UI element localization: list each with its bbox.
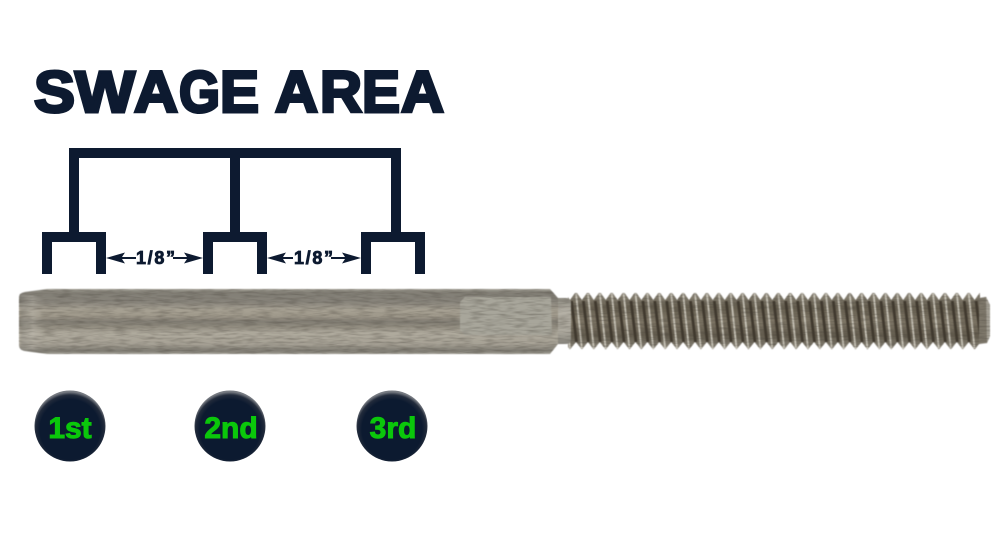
- title: R: [320, 60, 362, 125]
- neck: [551, 298, 571, 344]
- title: E: [362, 60, 400, 125]
- badge: 2nd: [194, 390, 266, 462]
- bracket: 2nd swage: [203, 232, 267, 274]
- dimension: second 1/8 inch spacing: 1/8”: [294, 248, 333, 268]
- smooth shank: [19, 289, 558, 354]
- badge: 3rd: [356, 390, 428, 462]
- bracket: 3rd swage: [361, 232, 425, 274]
- title: A: [275, 60, 318, 125]
- title: E: [220, 60, 259, 125]
- title: S: [34, 60, 75, 125]
- swage area bracket: [42, 148, 425, 274]
- dimension: first 1/8 inch spacing: [106, 248, 203, 268]
- chamfered tip highlight: [21, 294, 45, 350]
- title: G: [179, 60, 220, 125]
- title: W: [75, 60, 135, 125]
- badge: 1st: [34, 390, 106, 462]
- threaded swage stud: [19, 289, 990, 354]
- badge: 3rd: 3rd: [370, 412, 416, 445]
- wrench flat: [460, 297, 552, 335]
- dimension: first 1/8 inch spacing: 1/8”: [136, 248, 175, 268]
- threaded end: [568, 290, 990, 352]
- badge: 1st: 1st: [48, 412, 92, 445]
- bracket: 1st swage: [42, 232, 106, 274]
- dimension: second 1/8 inch spacing: [267, 248, 361, 268]
- title: [34, 60, 444, 125]
- title: A: [401, 60, 444, 125]
- badge: 2nd: 2nd: [204, 412, 258, 445]
- title: A: [134, 60, 178, 125]
